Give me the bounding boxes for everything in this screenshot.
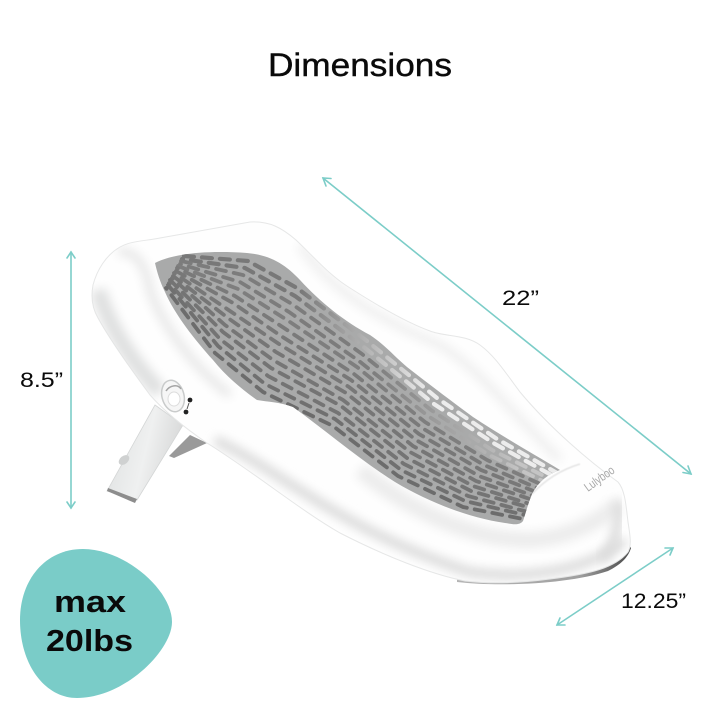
title: Dimensions: [268, 47, 452, 83]
arrow: 8.5 inch height: [67, 252, 75, 508]
grey mesh seat: [155, 252, 560, 524]
shell shading: [98, 245, 625, 575]
mesh base: [155, 252, 560, 524]
white shell: [92, 222, 630, 583]
bath seat body: [92, 222, 631, 584]
label: 8.5 inches: 8.5”: [20, 369, 63, 392]
teal blob: [20, 549, 172, 698]
badge: max 20lbs: 20lbs: [46, 623, 133, 658]
inner rim highlight: [532, 464, 580, 494]
label: 22 inches: 22”: [502, 287, 539, 310]
rear strut: [169, 435, 207, 458]
lock icon: [184, 398, 192, 414]
arrow: 22 inch length: [323, 178, 691, 474]
base shadow: [457, 544, 631, 584]
bath support: fold-out leg: [107, 405, 207, 503]
badge text: max: [54, 584, 127, 619]
leg panel: [107, 405, 183, 500]
release button: [158, 378, 188, 414]
perforations: [166, 256, 557, 519]
badge: max 20lbs: [20, 549, 172, 698]
label: 12.25 inches: 12.25”: [621, 590, 686, 613]
brand logo: Lulyboo: [582, 463, 617, 494]
arrow: 12.25 inch width: [557, 548, 673, 625]
